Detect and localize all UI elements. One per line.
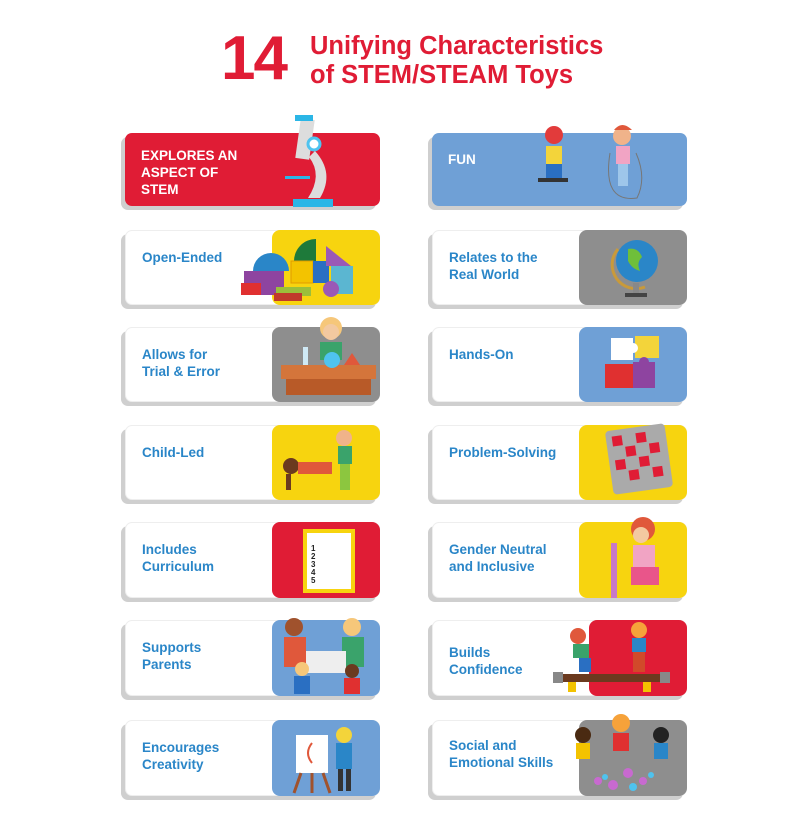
icon: worksheet xyxy=(303,529,355,593)
icon: kids playing with blocks xyxy=(575,714,669,791)
icon: girl stacking blocks xyxy=(611,517,659,598)
card: gender neutral: and Inclusive xyxy=(449,559,535,574)
card: encourages creativity: Encourages xyxy=(142,740,219,755)
card: child-led: Child-Led xyxy=(142,445,204,460)
card: problem-solving xyxy=(432,425,687,500)
card: encourages creativity xyxy=(125,720,380,796)
icon: worksheet: 4 xyxy=(311,568,316,577)
icon: blocks xyxy=(241,239,353,301)
card: hands-on: Hands-On xyxy=(449,347,514,362)
card: relates to real world: Relates to the xyxy=(449,250,538,265)
card: explores STEM xyxy=(125,133,380,206)
icon: family reading xyxy=(284,618,364,694)
icon: worksheet: 1 xyxy=(311,544,316,553)
card: trial and error xyxy=(125,327,380,402)
icon: child painting at easel xyxy=(292,727,352,794)
card: fun xyxy=(432,133,687,206)
title text: Unifying Characteristics xyxy=(310,32,603,60)
title xyxy=(221,24,603,93)
card: builds confidence xyxy=(432,620,687,696)
icon: worksheet: 2 xyxy=(311,552,316,561)
card: supports parents: Parents xyxy=(142,657,192,672)
card: fun: FUN xyxy=(448,152,476,167)
card: trial and error: Allows for xyxy=(142,347,207,362)
icon: worksheet: 5 xyxy=(311,576,316,585)
title number: 14 xyxy=(221,24,286,93)
icon: puzzle pieces xyxy=(605,336,659,388)
card: relates to real world xyxy=(432,230,687,305)
card: problem-solving: Problem-Solving xyxy=(449,445,556,460)
card: gender neutral xyxy=(432,522,687,598)
card: gender neutral: Gender Neutral xyxy=(449,542,547,557)
icon: number board xyxy=(605,424,673,494)
card: relates to real world: Real World xyxy=(449,267,519,282)
card: includes curriculum xyxy=(125,522,380,598)
card: explores STEM: STEM xyxy=(141,182,179,197)
card: open-ended: Open-Ended xyxy=(142,250,222,265)
icon: kids on balance beam xyxy=(553,622,670,692)
card: child-led xyxy=(125,425,380,500)
title text xyxy=(310,32,603,89)
card: social and emotional xyxy=(432,720,687,796)
title text: of STEM/STEAM Toys xyxy=(310,61,573,89)
card: social and emotional: Social and xyxy=(449,738,517,753)
card: hands-on xyxy=(432,327,687,402)
icon: kids playing wheelbarrow xyxy=(283,430,352,490)
card: supports parents: Supports xyxy=(142,640,201,655)
card: builds confidence: Confidence xyxy=(449,662,523,677)
icon: microscope xyxy=(285,115,333,207)
card: encourages creativity: Creativity xyxy=(142,757,204,772)
icon: kids skating and jumping rope xyxy=(538,125,642,199)
card: includes curriculum: Includes xyxy=(142,542,197,557)
icon: girl with lab flasks xyxy=(281,317,376,395)
icon: worksheet: 3 xyxy=(311,560,316,569)
card: includes curriculum: Curriculum xyxy=(142,559,214,574)
card: builds confidence: Builds xyxy=(449,645,490,660)
card: trial and error: Trial & Error xyxy=(142,364,220,379)
icon: globe xyxy=(610,240,658,297)
card: supports parents xyxy=(125,620,380,696)
card: explores STEM: EXPLORES AN xyxy=(141,148,237,163)
card: explores STEM: ASPECT OF xyxy=(141,165,218,180)
card: social and emotional: Emotional Skills xyxy=(449,755,553,770)
card: open-ended xyxy=(125,230,380,305)
